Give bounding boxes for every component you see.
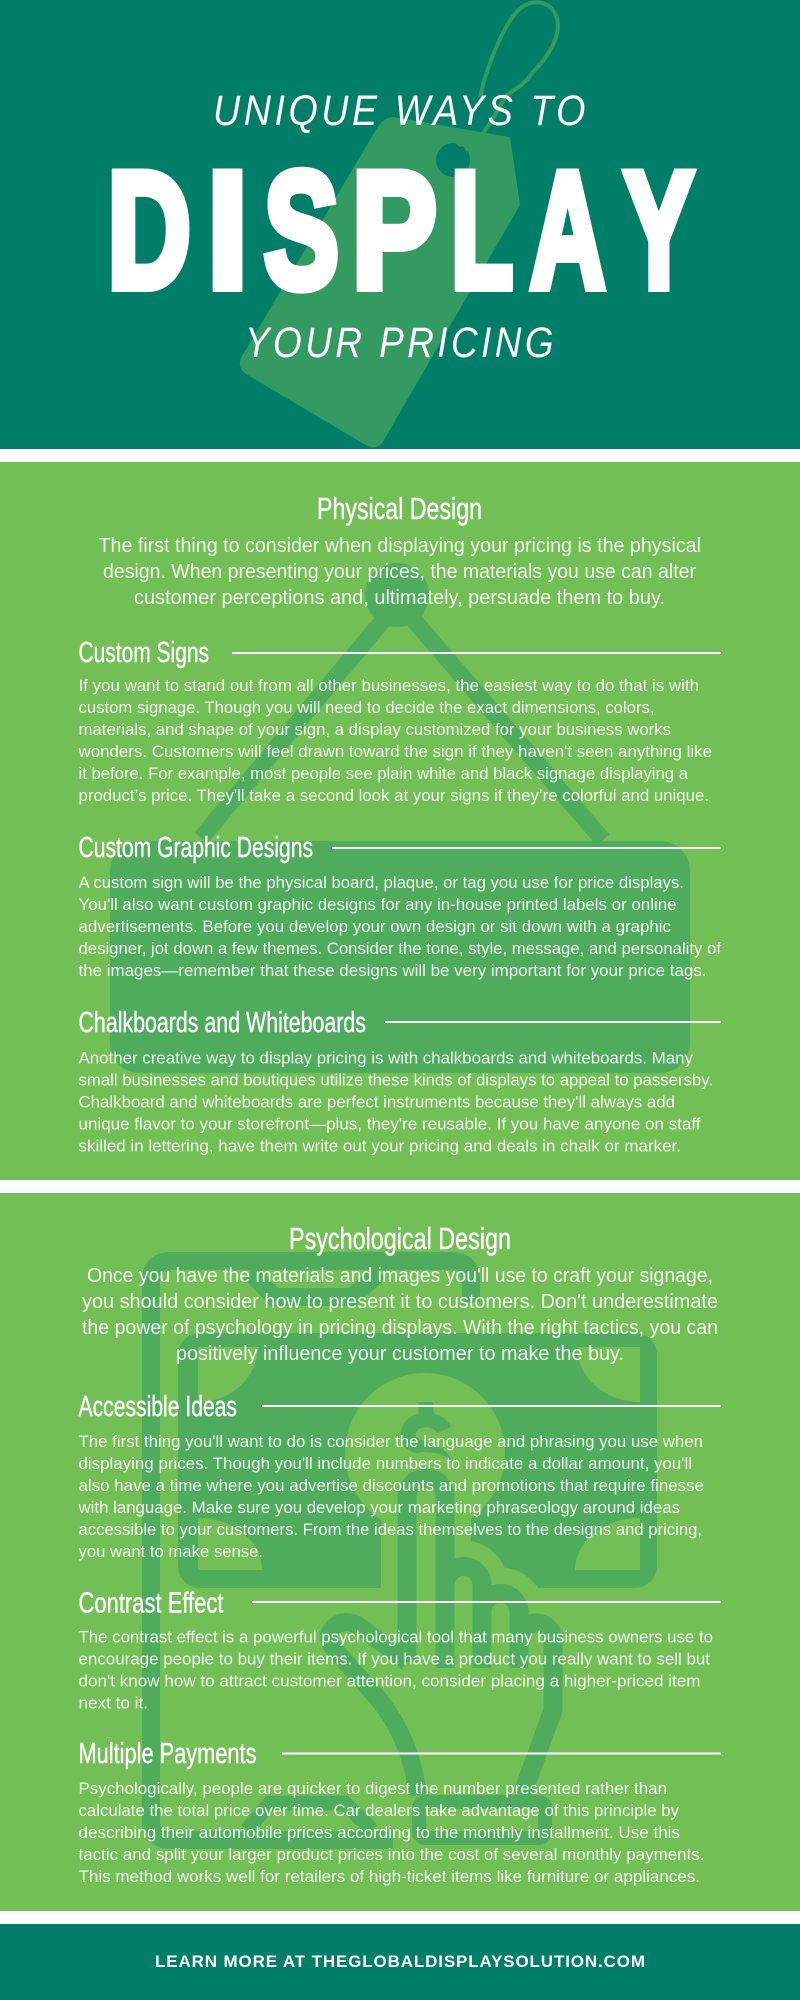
block: custom signs [77, 637, 721, 805]
block: multiple payments: describing their automobile prices according to the monthly installment. Use this [78, 1824, 680, 1842]
icon: price tag [240, 2, 558, 447]
text: psychological design intro [82, 1264, 718, 1365]
block: custom signs: Custom Signs [78, 637, 209, 669]
title: display: A [530, 138, 605, 322]
heading: psychological design: Psychological Design [289, 1221, 511, 1256]
text: physical design intro: The first thing to consider when displaying your pricing is the physical [98, 534, 701, 557]
block: multiple payments: Psychologically, people are quicker to digest the number presented rather than [78, 1780, 667, 1798]
icon: hanging sign [110, 563, 690, 1073]
block: accessible ideas: The first thing you'll want to do is consider the language and phrasing you use when [78, 1433, 703, 1451]
panel: psychological design [0, 1193, 800, 1911]
block: multiple payments: calculate the total price over time. Car dealers take advantage of this principle by [78, 1802, 680, 1820]
block: multiple payments: This method works well for retailers of high-ticket items like furniture or appliances. [78, 1868, 700, 1886]
title: display: P [352, 138, 437, 322]
panel: physical design [0, 462, 800, 1180]
block: multiple payments: Multiple Payments [78, 1738, 256, 1770]
icon: money and hand [151, 1261, 657, 1840]
title: display: D [108, 138, 191, 322]
block: accessible ideas: Accessible Ideas [78, 1391, 237, 1423]
text: psychological design intro: Once you have the materials and images you'll use to craft your signage, [87, 1264, 713, 1287]
block: custom graphic designs: A custom sign will be the physical board, plaque, or tag you use for price displays. [78, 874, 684, 892]
block: chalkboards and whiteboards [78, 1007, 721, 1156]
block: custom graphic designs: designer, jot down a few themes. Consider the tone, style, message, and personality of [78, 940, 721, 958]
block: custom signs: materials, and shape of your sign, a display customized for your business works [78, 721, 671, 739]
block: contrast effect: encourage people to buy their items. If you have a product you really want to sell but [78, 1650, 710, 1668]
block: multiple payments [78, 1738, 721, 1886]
block: accessible ideas [77, 1391, 721, 1561]
block: custom graphic designs: advertisements. Before you develop your own design or sit down with a graphic [78, 918, 671, 936]
block: custom signs: custom signage. Though you will need to decide the exact dimensions, colors, [78, 699, 654, 717]
block: custom graphic designs: Custom Graphic Designs [78, 832, 313, 864]
block: custom signs: wonders. Customers will feel drawn toward the sign if they haven't seen anything like [77, 743, 712, 761]
text: physical design intro [98, 534, 701, 609]
heading: physical design: Physical Design [317, 491, 482, 526]
block: chalkboards and whiteboards: Chalkboard and whiteboards are perfect instruments because they'll always add [78, 1094, 675, 1112]
block: contrast effect [78, 1588, 721, 1712]
block: contrast effect: next to it. [78, 1694, 148, 1712]
panel: footer [0, 1924, 800, 2000]
block: accessible ideas: also have a time where you advertise discounts and promotions that require finesse [78, 1477, 704, 1495]
title: your pricing: YOUR PRICING [245, 319, 557, 367]
block: chalkboards and whiteboards: small businesses and boutiques utilize these kinds of displays to appeal to passersby. [78, 1072, 713, 1090]
block: accessible ideas: with language. Make sure you develop your marketing phraseology around ideas [77, 1499, 680, 1517]
text: psychological design intro: you should consider how to present it to customers. Don't underestimate [82, 1290, 718, 1313]
title: display: Y [624, 138, 694, 322]
text: psychological design intro: the power of psychology in pricing displays. With the right tactics, you can [82, 1316, 718, 1339]
block: contrast effect: don't know how to attract customer attention, consider placing a higher-priced item [78, 1672, 700, 1690]
title: display: S [264, 138, 339, 322]
title: display: L [451, 138, 513, 322]
block: accessible ideas: you want to make sense. [78, 1543, 263, 1561]
block: custom signs: product’s price. They'll take a second look at your signs if they’re colorful and unique. [78, 787, 709, 805]
block: custom graphic designs: You'll also want custom graphic designs for any in-house printed labels or online [78, 896, 676, 914]
block: chalkboards and whiteboards: Another creative way to display pricing is with chalkboards and whiteboards. Many [78, 1050, 694, 1068]
block: contrast effect: Contrast Effect [78, 1588, 224, 1620]
text: physical design intro: design. When presenting your prices, the materials you use can alter [103, 560, 696, 583]
text: physical design intro: customer perceptions and, ultimately, persuade them to buy. [134, 586, 665, 609]
title: unique ways to: UNIQUE WAYS TO [213, 87, 589, 135]
block: contrast effect: The contrast effect is a powerful psychological tool that many business owners use to [78, 1628, 713, 1646]
block: chalkboards and whiteboards: unique flavor to your storefront—plus, they're reusable. If you have anyone on staff [78, 1116, 701, 1134]
block: custom signs: If you want to stand out from all other businesses, the easiest way to do that is with [78, 677, 699, 695]
panel: header [0, 0, 800, 449]
block: custom graphic designs: the images—remember that these designs will be very important for your price tags. [78, 962, 706, 980]
text: footer call to action: LEARN MORE AT THEGLOBALDISPLAYSOLUTION.COM [155, 1952, 645, 1971]
block: custom signs: it before. For example, most people see plain white and black signage displaying a [78, 765, 689, 783]
block: multiple payments: tactic and split your larger product prices into the cost of several monthly payments. [78, 1846, 705, 1864]
block: chalkboards and whiteboards: skilled in lettering, have them write out your pricing and deals in chalk or marker. [78, 1138, 681, 1156]
block: custom graphic designs [78, 832, 721, 980]
block: chalkboards and whiteboards: Chalkboards and Whiteboards [78, 1007, 366, 1039]
block: accessible ideas: displaying prices. Though you'll include numbers to indicate a dollar amount, you'll [78, 1455, 692, 1473]
text: psychological design intro: positively influence your customer to make the buy. [176, 1342, 624, 1365]
block: accessible ideas: accessible to your customers. From the ideas themselves to the designs and pricing, [78, 1521, 702, 1539]
title: display: I [207, 138, 248, 322]
